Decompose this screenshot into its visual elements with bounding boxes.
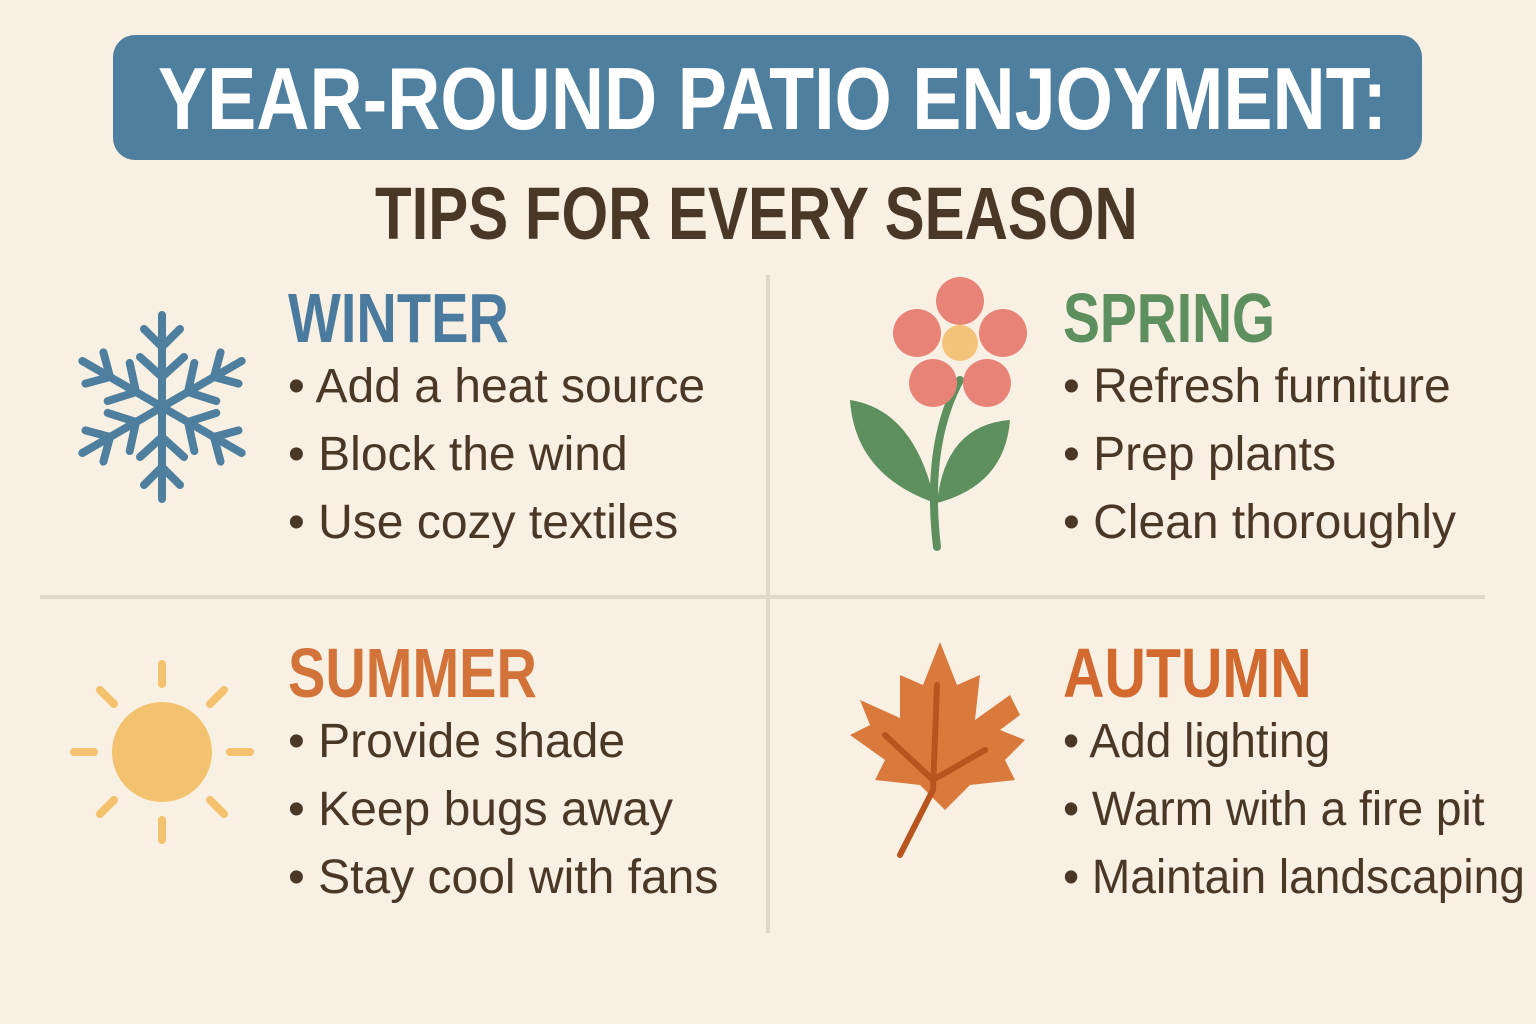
heading: autumn: AUTUMN [1063, 634, 1312, 712]
list: winter tips: • Add a heat source [288, 360, 705, 413]
list: autumn tips [1063, 715, 1525, 904]
panel: spring [850, 277, 1456, 551]
list: winter tips [288, 360, 705, 549]
heading: summer: SUMMER [288, 634, 537, 712]
list: spring tips [1063, 360, 1456, 549]
panel: autumn [850, 634, 1525, 904]
list: spring tips: • Prep plants [1063, 428, 1336, 481]
heading: winter: WINTER [288, 279, 509, 357]
list: autumn tips: • Maintain landscaping [1063, 851, 1525, 904]
heading: spring: SPRING [1063, 279, 1275, 357]
list: winter tips: • Block the wind [288, 428, 628, 481]
title banner [113, 35, 1422, 160]
icon: snowflake [78, 311, 246, 503]
icon: maple leaf [850, 642, 1025, 858]
panel: winter [78, 279, 705, 549]
subtitle: TIPS FOR EVERY SEASON [375, 172, 1138, 255]
icon: flower [850, 277, 1027, 551]
title text: YEAR-ROUND PATIO ENJOYMENT: [158, 49, 1387, 148]
list: autumn tips: • Warm with a fire pit [1063, 783, 1485, 836]
list: summer tips: • Provide shade [288, 715, 625, 768]
list: spring tips: • Clean thoroughly [1063, 496, 1456, 549]
panel: summer [70, 634, 718, 904]
icon: sun [70, 660, 254, 844]
list: summer tips [288, 715, 718, 904]
list: autumn tips: • Add lighting [1063, 715, 1330, 768]
list: spring tips: • Refresh furniture [1063, 360, 1451, 413]
list: summer tips: • Keep bugs away [288, 783, 673, 836]
list: winter tips: • Use cozy textiles [288, 496, 678, 549]
list: summer tips: • Stay cool with fans [288, 851, 718, 904]
